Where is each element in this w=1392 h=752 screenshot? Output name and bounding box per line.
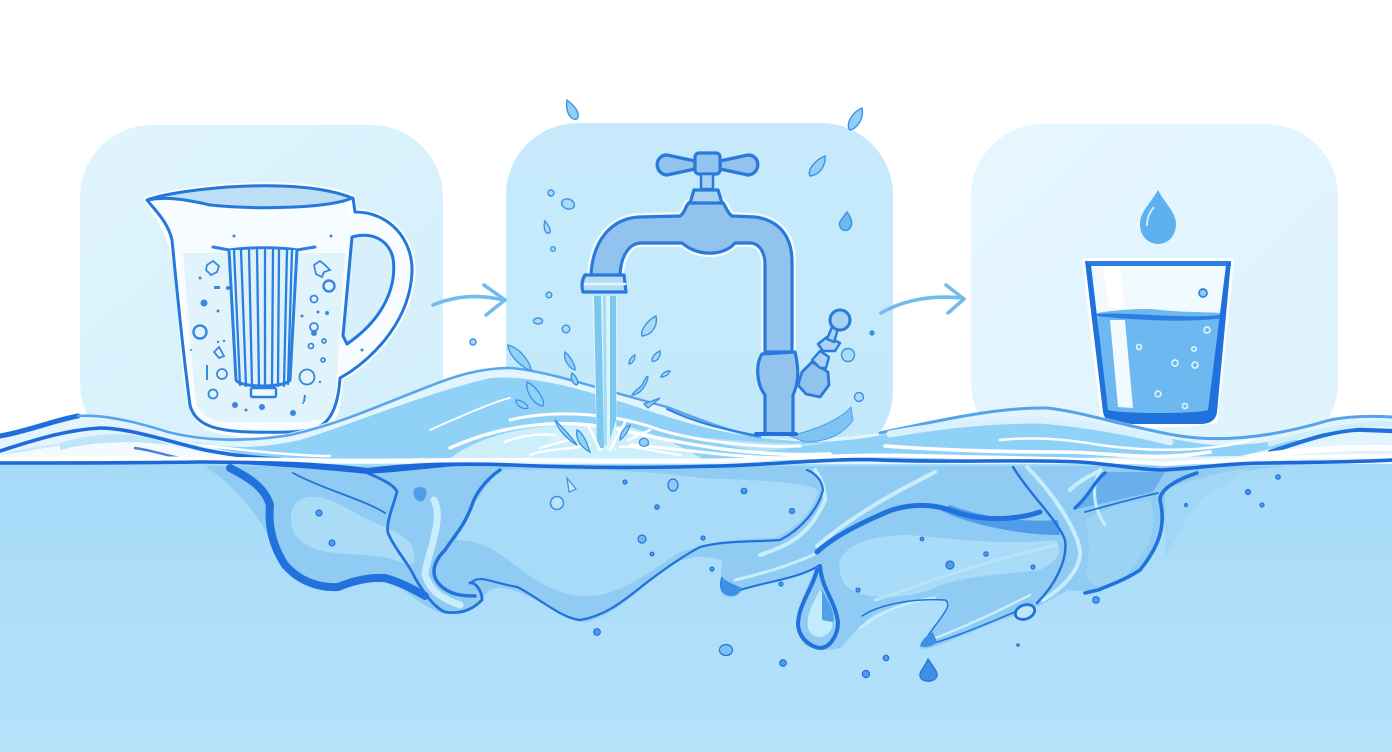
wave crest right of the faucet: [790, 407, 853, 442]
filter cartridge: [213, 247, 315, 397]
icon: glass of water: [1085, 190, 1231, 424]
side valve: [798, 362, 829, 397]
water body below the surface: [0, 464, 1392, 752]
handle: [657, 155, 695, 175]
underwater droplets and bubbles: [316, 475, 1280, 681]
lighter pockets inside the splash: [291, 497, 415, 564]
arrow: pitcher to faucet: [433, 285, 505, 315]
contaminant particles: [194, 261, 334, 402]
large teardrop core: [808, 590, 832, 637]
panel: pitcher: [80, 125, 443, 455]
mid-blue patches: [1073, 472, 1165, 510]
underwater splash silhouette: [205, 466, 1290, 650]
droplets around the faucet: [470, 100, 874, 402]
aerator: [582, 275, 626, 292]
panel: glass: [971, 124, 1338, 454]
wave outlines: [0, 368, 1392, 459]
icon: faucet: [582, 153, 850, 450]
base: [758, 352, 798, 434]
pale streaks: [425, 467, 1105, 640]
waterline: [0, 455, 1392, 474]
dark blue current lines: [230, 467, 1197, 648]
impact splash foam: [505, 422, 690, 460]
foam patch where the stream lands: [450, 425, 705, 460]
arrow: faucet to glass: [881, 285, 964, 313]
water stream: [592, 296, 617, 450]
icon: water pitcher: [147, 186, 412, 434]
drop above the glass: [1140, 190, 1176, 244]
surface wave band: [0, 368, 1392, 468]
panel: faucet: [506, 123, 893, 463]
splash droplets above the wave: [508, 345, 660, 452]
spout body halo: [591, 202, 792, 352]
wave highlights: [200, 398, 1392, 458]
tail blob: [721, 578, 742, 596]
spout body: [591, 202, 792, 352]
loop ring on the current: [1013, 602, 1037, 622]
bubbles in the glass: [1136, 289, 1210, 408]
